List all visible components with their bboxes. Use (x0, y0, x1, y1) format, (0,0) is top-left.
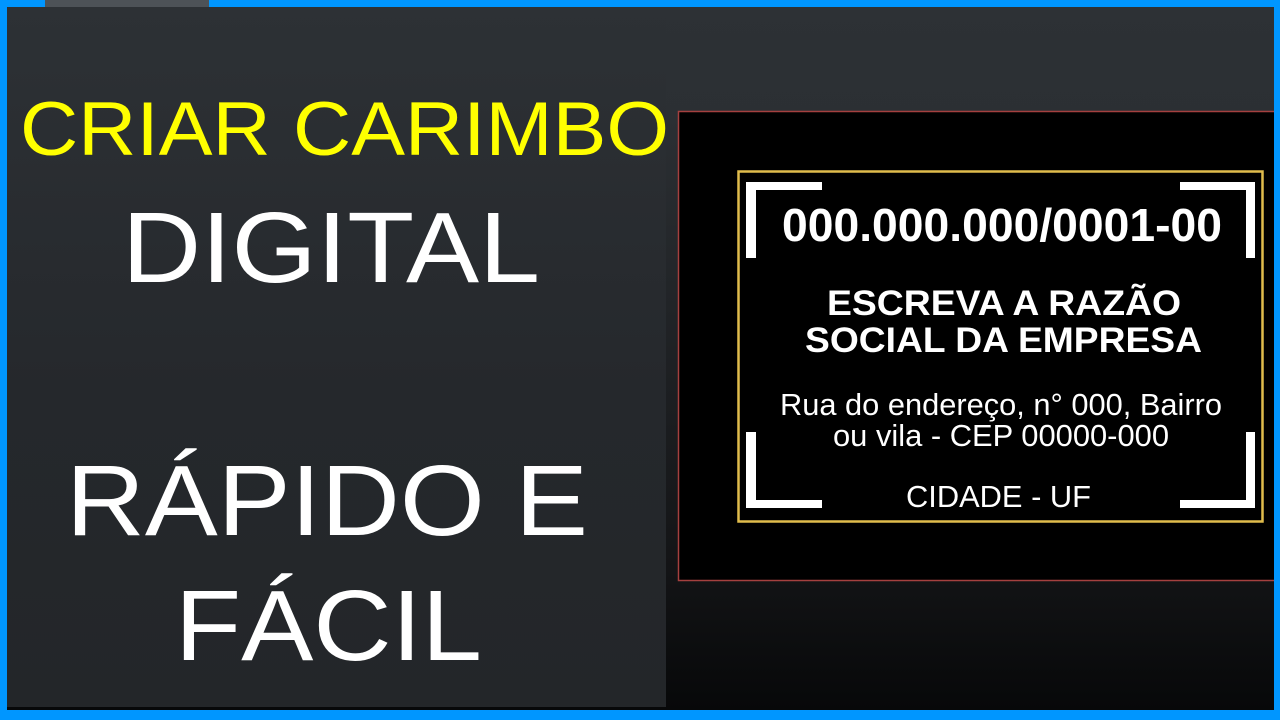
heading: criar carimbo: CRIAR CARIMBO (20, 87, 669, 172)
stamp corner brackets (746, 182, 1255, 508)
left panel (7, 7, 666, 707)
black panel (678, 111, 1274, 581)
stamp text: SOCIAL DA EMPRESA (805, 321, 1202, 360)
heading: digital: DIGITAL (122, 192, 540, 304)
stamp gold border (738, 172, 1262, 522)
stamp text: ou vila - CEP 00000-000 (833, 419, 1169, 453)
cnpj number: 000.000.000/0001-00 (782, 199, 1222, 251)
stamp preview panel (678, 111, 1274, 581)
city and state: CIDADE - UF (906, 480, 1091, 514)
top tab (45, 0, 209, 7)
stamp text (780, 199, 1222, 514)
red panel outline (678, 112, 1274, 580)
headline (20, 87, 669, 682)
heading: fácil: FÁCIL (175, 570, 482, 682)
heading: rápido e: RÁPIDO E (66, 445, 588, 557)
company name: ESCREVA A RAZÃO (827, 284, 1181, 323)
address: Rua do endereço, n° 000, Bairro (780, 388, 1222, 422)
